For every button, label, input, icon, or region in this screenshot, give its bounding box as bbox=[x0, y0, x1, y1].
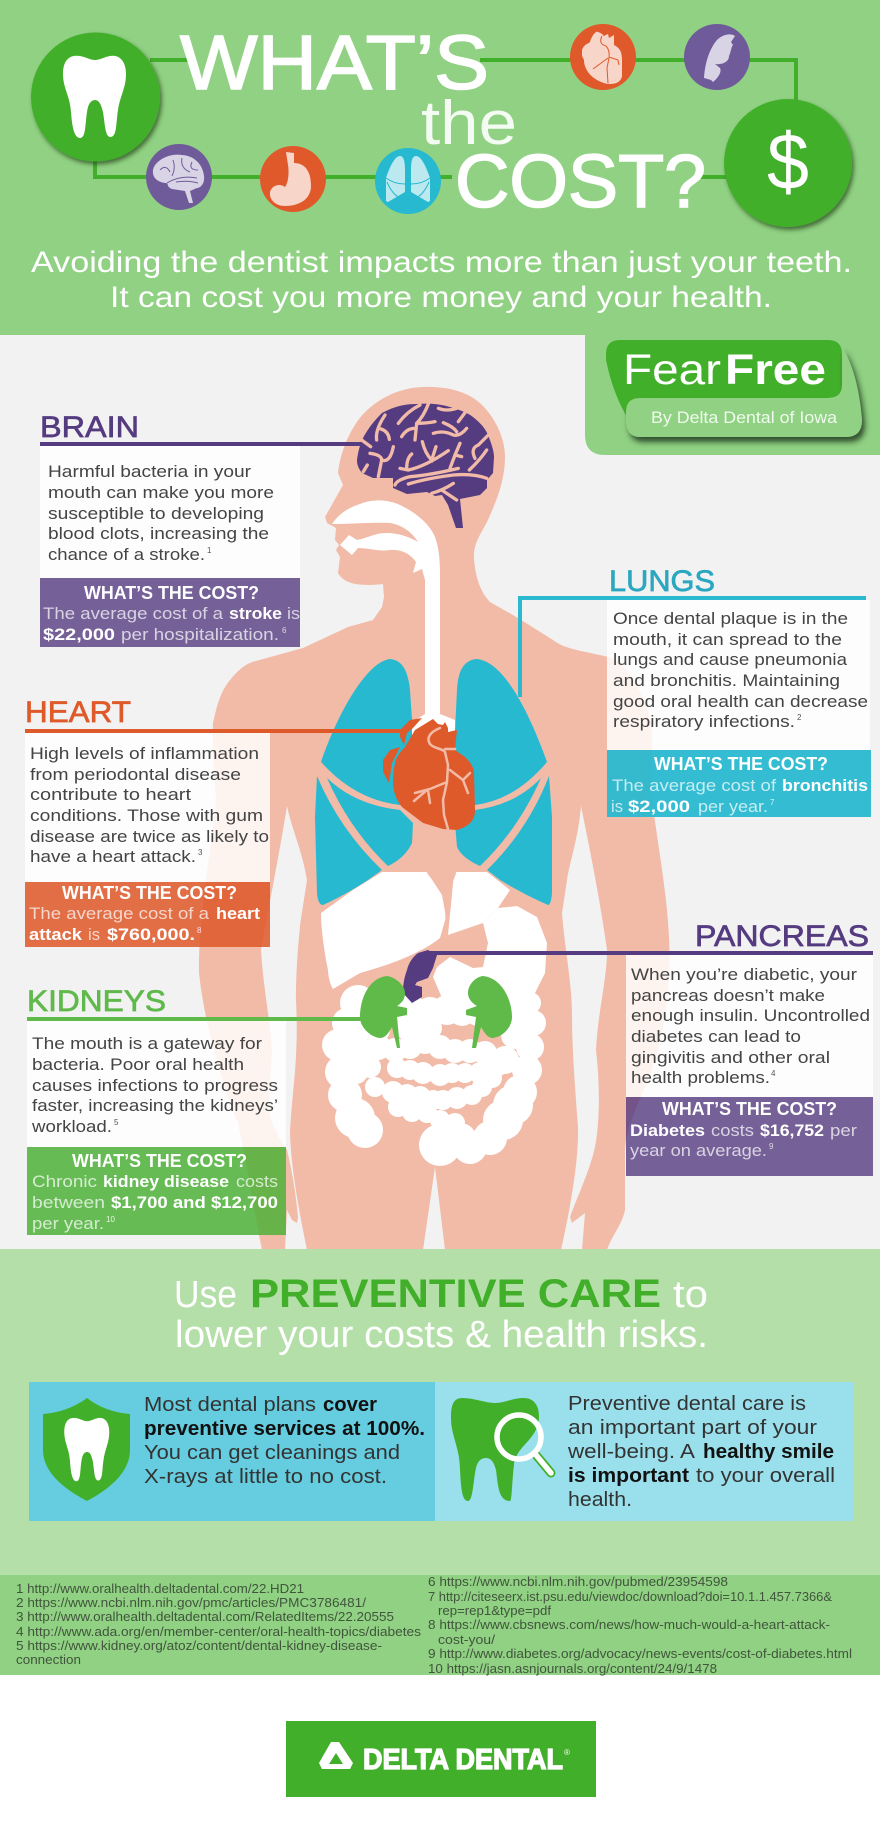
body text bbox=[30, 744, 269, 866]
body text bbox=[31, 1034, 278, 1136]
cost box: The average cost of a bbox=[43, 604, 224, 623]
body text: 2 bbox=[797, 713, 802, 722]
text: to your overall bbox=[696, 1464, 835, 1487]
logo: delta dental bbox=[286, 1721, 596, 1797]
cost box: WHAT’S THE COST? bbox=[72, 1151, 247, 1171]
body text: enough insulin. Uncontrolled bbox=[631, 1006, 870, 1025]
cost box: WHAT’S THE COST? bbox=[662, 1099, 837, 1119]
body text: mouth, it can spread to the bbox=[613, 630, 842, 649]
body text: pancreas doesn’t make bbox=[631, 986, 825, 1005]
lungs bbox=[315, 659, 552, 905]
text bbox=[567, 1392, 835, 1511]
icon: pancreas bbox=[684, 24, 750, 90]
logo: delta dental: ® bbox=[564, 1748, 570, 1757]
body text: health problems. bbox=[631, 1068, 770, 1087]
body text: contribute to heart bbox=[30, 785, 191, 804]
title bbox=[180, 20, 706, 223]
cost box bbox=[40, 578, 300, 647]
text: healthy smile bbox=[703, 1440, 834, 1463]
connector lines bbox=[95, 60, 796, 177]
footnotes: connection bbox=[16, 1653, 81, 1667]
cost box: stroke bbox=[229, 604, 282, 623]
panel: heart bbox=[25, 696, 404, 947]
body text: mouth can make you more bbox=[48, 483, 274, 502]
body text: 5 bbox=[114, 1118, 119, 1127]
body text: bacteria. Poor oral health bbox=[32, 1055, 244, 1074]
heading: LUNGS bbox=[609, 565, 715, 598]
icon: dollar: $ bbox=[767, 117, 809, 206]
heading: Use bbox=[174, 1274, 237, 1316]
cost box: is bbox=[88, 925, 100, 944]
icon: dollar bbox=[724, 99, 852, 227]
panel: kidneys bbox=[27, 985, 362, 1235]
cost box bbox=[626, 1097, 873, 1176]
badge name bbox=[623, 346, 826, 394]
cost box: bronchitis bbox=[782, 776, 868, 795]
heading: PANCREAS bbox=[695, 920, 869, 953]
icon: lungs bbox=[375, 148, 441, 214]
title: the bbox=[421, 89, 517, 158]
footnotes: cost-you/ bbox=[438, 1633, 496, 1647]
footnotes: 1 http://www.oralhealth.deltadental.com/22.HD21 bbox=[16, 1582, 304, 1596]
subtitle bbox=[31, 246, 852, 314]
icon: tooth bbox=[31, 32, 160, 162]
badge name: Free bbox=[725, 346, 826, 394]
body text: disease are twice as likely to bbox=[30, 827, 269, 846]
body text: lungs and cause pneumonia bbox=[613, 650, 848, 669]
icon: heart bbox=[570, 24, 636, 90]
body text: diabetes can lead to bbox=[631, 1027, 801, 1046]
body text: causes infections to progress bbox=[32, 1076, 278, 1095]
cost box bbox=[607, 750, 871, 817]
panel: covered services bbox=[29, 1382, 435, 1521]
airway bbox=[332, 500, 440, 715]
footnotes bbox=[0, 1575, 880, 1676]
cost box: $22,000 bbox=[43, 625, 115, 644]
badge byline: By Delta Dental of Iowa bbox=[651, 409, 838, 427]
cost box: costs bbox=[711, 1121, 754, 1140]
text: cover bbox=[323, 1393, 377, 1416]
dark tab bbox=[606, 340, 842, 436]
heading: lower your costs & health risks. bbox=[175, 1314, 708, 1356]
body text: When you’re diabetic, your bbox=[631, 965, 857, 984]
body text bbox=[613, 609, 868, 731]
body text: good oral health can decrease bbox=[613, 692, 868, 711]
leader line bbox=[520, 598, 866, 697]
heading bbox=[174, 1272, 708, 1356]
text bbox=[144, 1393, 425, 1488]
body text bbox=[48, 462, 274, 564]
cost box: Chronic bbox=[32, 1172, 98, 1191]
body text: 4 bbox=[771, 1069, 776, 1078]
footnotes: 9 http://www.diabetes.org/advocacy/news-events/cost-of-diabetes.html bbox=[428, 1647, 852, 1661]
brain bbox=[357, 404, 494, 528]
heading: to bbox=[673, 1274, 708, 1316]
body text: from periodontal disease bbox=[30, 765, 241, 784]
body illustration bbox=[199, 387, 669, 1250]
cost box: $16,752 bbox=[760, 1121, 824, 1140]
cost box: is bbox=[287, 604, 300, 623]
text: Preventive dental care is bbox=[568, 1392, 806, 1415]
cost box: costs bbox=[236, 1172, 278, 1191]
body text: chance of a stroke. bbox=[48, 545, 205, 564]
footnotes: 2 https://www.ncbi.nlm.nih.gov/pmc/articles/PMC3786481/ bbox=[16, 1596, 367, 1610]
cost box: $760,000. bbox=[107, 925, 195, 944]
text: X-rays at little to no cost. bbox=[144, 1465, 387, 1488]
subtitle: Avoiding the dentist impacts more than just your teeth. bbox=[31, 246, 852, 279]
cost box: The average cost of bbox=[612, 776, 776, 795]
header band bbox=[0, 0, 880, 335]
cost box: 9 bbox=[769, 1142, 774, 1151]
body text: 1 bbox=[207, 546, 212, 555]
body section background bbox=[0, 335, 880, 1249]
footnotes: 6 https://www.ncbi.nlm.nih.gov/pubmed/23954598 bbox=[428, 1575, 728, 1589]
cost box: per hospitalization. bbox=[121, 625, 279, 644]
cost box: per bbox=[830, 1121, 857, 1140]
body text: Once dental plaque is in the bbox=[613, 609, 848, 628]
heading: PREVENTIVE CARE bbox=[250, 1272, 661, 1316]
icon: tooth with magnifier bbox=[451, 1398, 551, 1501]
body text: 3 bbox=[198, 848, 203, 857]
cost box: year on average. bbox=[630, 1141, 767, 1160]
body silhouette bbox=[199, 387, 669, 1250]
panel: brain bbox=[40, 411, 362, 647]
cost box: between bbox=[32, 1193, 105, 1212]
leader line bbox=[27, 1017, 362, 1021]
bile duct lines bbox=[428, 872, 455, 938]
liver and digestive organs bbox=[321, 872, 547, 1166]
body text: blood clots, increasing the bbox=[48, 524, 269, 543]
cost box: per year. bbox=[698, 797, 768, 816]
footnotes: 7 http://citeseerx.ist.psu.edu/viewdoc/download?doi=10.1.1.457.7366& bbox=[428, 1590, 833, 1604]
cost box: 7 bbox=[770, 798, 775, 807]
footnotes: 3 http://www.oralhealth.deltadental.com/RelatedItems/22.20555 bbox=[16, 1610, 394, 1624]
icon: brain bbox=[146, 144, 212, 210]
body text: The mouth is a gateway for bbox=[32, 1034, 262, 1053]
body text: have a heart attack. bbox=[30, 847, 196, 866]
text: Most dental plans bbox=[144, 1393, 316, 1416]
footnotes: 4 http://www.ada.org/en/member-center/oral-health-topics/diabetes bbox=[16, 1625, 421, 1639]
badge name: Fear bbox=[623, 346, 721, 394]
footnotes: rep=rep1&type=pdf bbox=[438, 1604, 552, 1618]
cost box: kidney disease bbox=[103, 1172, 229, 1191]
cost box: 6 bbox=[282, 626, 287, 635]
heading: BRAIN bbox=[40, 411, 139, 444]
cost box: attack bbox=[29, 925, 83, 944]
title: WHAT’S bbox=[180, 20, 489, 106]
heading: HEART bbox=[25, 696, 131, 729]
cost box bbox=[27, 1147, 286, 1235]
icon: shield tooth bbox=[43, 1398, 130, 1501]
cost box: heart bbox=[216, 904, 260, 923]
panel: healthy smile bbox=[435, 1382, 853, 1521]
light tab bbox=[626, 347, 862, 437]
title: COST? bbox=[455, 139, 706, 223]
body text: respiratory infections. bbox=[613, 712, 795, 731]
large intestine bbox=[340, 985, 376, 1021]
body text bbox=[631, 965, 870, 1087]
text: You can get cleanings and bbox=[144, 1441, 400, 1464]
footnotes: 5 https://www.kidney.org/atoz/content/dental-kidney-disease- bbox=[16, 1639, 382, 1653]
footnotes: 10 https://jasn.asnjournals.org/content/24/9/1478 bbox=[428, 1662, 717, 1676]
body text: susceptible to developing bbox=[48, 504, 264, 523]
text: an important part of your bbox=[568, 1416, 817, 1439]
icon: stomach bbox=[260, 146, 326, 212]
heading: KIDNEYS bbox=[27, 985, 166, 1018]
body text: Harmful bacteria in your bbox=[48, 462, 251, 481]
panel: fear free badge bbox=[585, 335, 880, 455]
body text: and bronchitis. Maintaining bbox=[613, 671, 840, 690]
cost box: WHAT’S THE COST? bbox=[654, 754, 828, 774]
cost box: is bbox=[611, 797, 623, 816]
cost box: 10 bbox=[106, 1215, 115, 1224]
heart bbox=[383, 718, 475, 830]
panel: lungs bbox=[520, 565, 871, 817]
body text: workload. bbox=[31, 1117, 112, 1136]
pancreas bbox=[403, 950, 437, 1003]
cost box: 8 bbox=[197, 926, 202, 935]
cost box: per year. bbox=[32, 1214, 104, 1233]
subtitle: It can cost you more money and your health. bbox=[110, 281, 772, 314]
leader line bbox=[426, 951, 873, 955]
text: health. bbox=[568, 1488, 632, 1511]
cost box: Diabetes bbox=[630, 1121, 705, 1140]
logo: delta dental: DELTA DENTAL bbox=[363, 1744, 563, 1776]
cost box: $1,700 and $12,700 bbox=[111, 1193, 278, 1212]
body text: conditions. Those with gum bbox=[30, 806, 263, 825]
cost box bbox=[25, 882, 270, 947]
body text: High levels of inflammation bbox=[30, 744, 259, 763]
section: preventive care bbox=[0, 1249, 880, 1575]
text: well-being. A bbox=[567, 1440, 695, 1463]
cost box: WHAT’S THE COST? bbox=[62, 883, 237, 903]
small intestine bbox=[355, 990, 385, 1020]
body text: gingivitis and other oral bbox=[631, 1048, 830, 1067]
body text: faster, increasing the kidneys’ bbox=[32, 1096, 278, 1115]
footnotes: 8 https://www.cbsnews.com/news/how-much-would-a-heart-attack- bbox=[428, 1618, 830, 1632]
panel: pancreas bbox=[426, 920, 873, 1176]
cost box: The average cost of a bbox=[29, 904, 210, 923]
leader line bbox=[40, 442, 362, 446]
cost box: $2,000 bbox=[628, 797, 690, 816]
leader line bbox=[25, 729, 404, 733]
kidneys bbox=[360, 976, 512, 1048]
cost box: WHAT’S THE COST? bbox=[84, 583, 259, 603]
text: preventive services at 100%. bbox=[144, 1417, 425, 1440]
text: is important bbox=[568, 1464, 689, 1487]
